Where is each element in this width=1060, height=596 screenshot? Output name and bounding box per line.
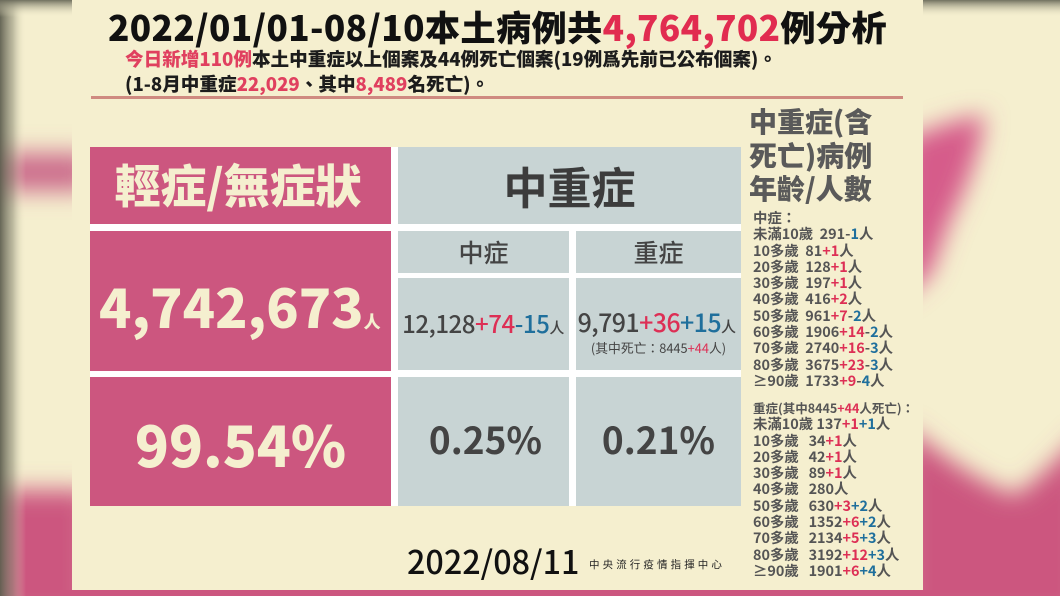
title: 2022/01/01-08/10本土病例共4,764,702例分析 (108, 1, 887, 52)
panel: moderate percent: 0.25% (429, 411, 542, 465)
panel: mild count (90, 231, 391, 371)
panel: mild percent: 99.54% (135, 403, 346, 484)
subtitle text: (1-8月中重症22,029、其中8,489名死亡)。 (125, 70, 489, 96)
panel: severe header (576, 231, 741, 273)
divider line (91, 96, 903, 99)
panel: moderate header (398, 231, 569, 273)
severe count figure: 9,791+36+15人 (578, 304, 735, 340)
subtitle text (125, 45, 777, 96)
panel: moderate-severe header (398, 147, 741, 224)
panel: mild percent (90, 377, 391, 506)
moderate age list: 中症： 未滿10歲 291-1人 10多歲 81+1人 20多歲 128+1人 30多歲 197+1人 40多歲 416+2人 50多歲 961+7-2人 60多歲 1906+14-2人 70多歲 2740+16-3人 80多歲 3675+23-3人 ≥90歲 1733+9-4人 (753, 207, 893, 391)
severe age list: 重症(其中8445+44人死亡)： 未滿10歲 137+1+1人 10多歲 34+1人 20多歲 42+1人 30多歲 89+1人 40多歲 280人 50多歲 630+3+2人 60多歲 1352+6+2人 70多歲 2134+5+3人 80多歲 3192+12+3人 ≥90歲 1901+6+4人 (753, 398, 914, 581)
panel: moderate count (398, 278, 569, 370)
age heading: 中重症(含 (749, 101, 872, 141)
panel: moderate-severe header: 中重症 (504, 153, 636, 217)
cream main panel (72, 0, 923, 590)
source: 中央流行疫情指揮中心 (589, 557, 725, 572)
panel: severe percent: 0.21% (602, 411, 715, 465)
date: 2022/08/11 (407, 538, 579, 584)
severe deaths note: (其中死亡：8445+44人) (591, 338, 726, 357)
white grid backing (90, 147, 741, 506)
panel: moderate header: 中症 (458, 234, 508, 270)
panel: mild header: 輕症/無症狀 (115, 151, 361, 217)
panel: severe count (576, 278, 741, 370)
panel: severe percent (576, 377, 741, 506)
age heading: 死亡)病例 (749, 134, 872, 174)
panel: mild count: 4,742,673人 (99, 267, 381, 344)
panel: severe header: 重症 (633, 234, 684, 270)
subtitle text: 今日新增110例本土中重症以上個案及44例死亡個案(19例爲先前已公布個案)。 (125, 45, 777, 72)
panel: moderate percent (398, 377, 569, 506)
bottom pink strip (60, 590, 940, 596)
age heading (749, 101, 872, 208)
age heading: 年齡/人數 (749, 168, 872, 208)
panel: moderate count: 12,128+74-15人 (402, 305, 564, 340)
